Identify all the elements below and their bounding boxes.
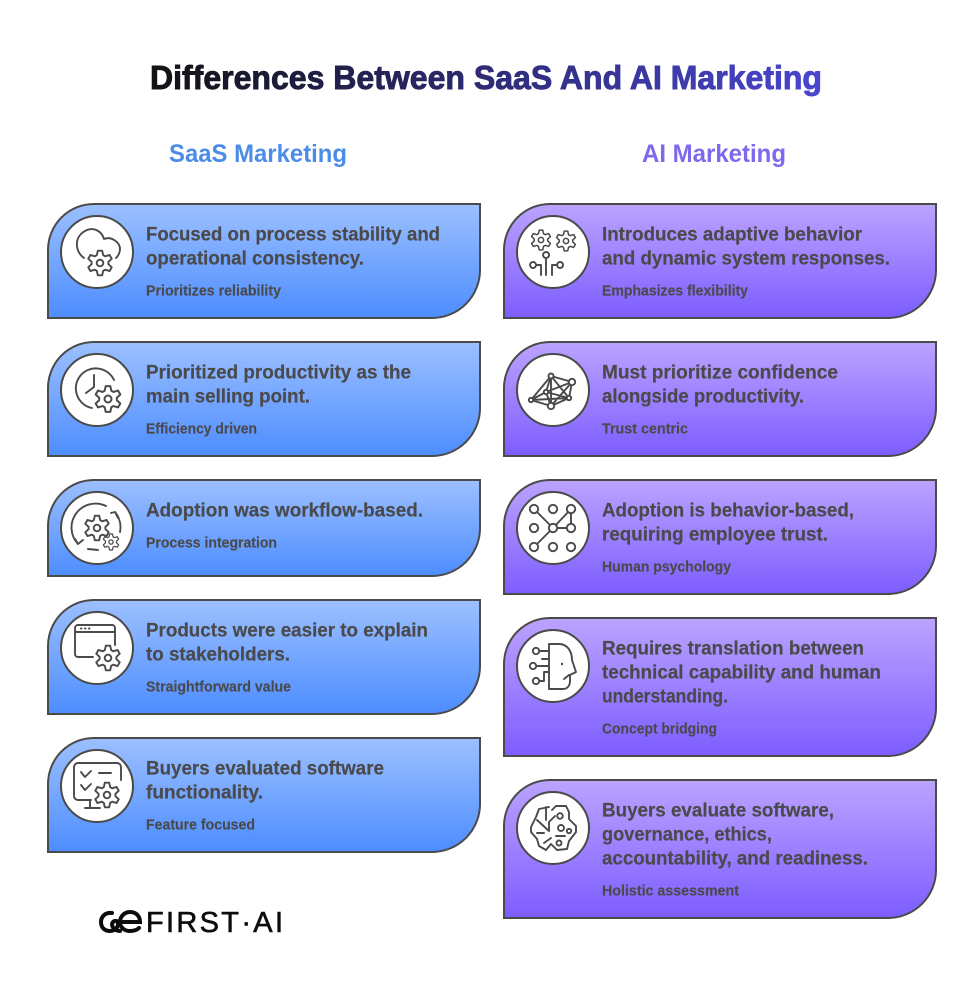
card text: Must prioritize confidence xyxy=(602,362,838,384)
card text: Adoption was workflow-based. xyxy=(146,500,423,522)
icon: AI head profile xyxy=(517,630,589,702)
panel: AI card 3 xyxy=(504,480,936,594)
card text: to stakeholders. xyxy=(146,644,290,666)
card text xyxy=(146,758,384,834)
heading: SaaS Marketing: SaaS Marketing xyxy=(169,140,347,168)
icon: monitor checklist with gear xyxy=(61,750,133,822)
card text: accountability, and readiness. xyxy=(602,848,868,870)
card text: Requires translation between xyxy=(602,638,864,660)
title: Differences Between SaaS And AI Marketing xyxy=(150,59,822,96)
icon: network mesh xyxy=(517,354,589,426)
card text xyxy=(602,362,838,438)
card text xyxy=(146,620,428,696)
card text xyxy=(602,638,881,738)
card text xyxy=(602,224,890,300)
icon: browser window with gear xyxy=(61,612,133,684)
card text: main selling point. xyxy=(146,386,310,408)
card text xyxy=(146,224,440,300)
panel: AI card 1 xyxy=(504,204,936,318)
card text: requiring employee trust. xyxy=(602,524,828,546)
panel: AI card 2 xyxy=(504,342,936,456)
card text: Process integration xyxy=(146,536,277,552)
panel: SaaS card 2 xyxy=(48,342,480,456)
card text: Emphasizes flexibility xyxy=(602,284,748,300)
heading: AI Marketing: AI Marketing xyxy=(642,140,786,168)
icon: gears and circuit xyxy=(517,216,589,288)
card text: Holistic assessment xyxy=(602,884,739,900)
card text: Efficiency driven xyxy=(146,422,257,438)
card text: Buyers evaluated software xyxy=(146,758,384,780)
card text: Straightforward value xyxy=(146,680,291,696)
card text: alongside productivity. xyxy=(602,386,804,408)
icon: cycle with gears xyxy=(61,492,133,564)
card text: Introduces adaptive behavior xyxy=(602,224,862,246)
card text: governance, ethics, xyxy=(602,824,772,846)
card text xyxy=(602,500,854,576)
card text: Prioritized productivity as the xyxy=(146,362,411,384)
icon: circuit brain xyxy=(517,792,589,864)
icon: node graph xyxy=(517,492,589,564)
panel: SaaS card 1 xyxy=(48,204,480,318)
panel: AI card 4 xyxy=(504,618,936,756)
card text: understanding. xyxy=(602,686,728,708)
card text: Buyers evaluate software, xyxy=(602,800,834,822)
card text: operational consistency. xyxy=(146,248,364,270)
card text: Concept bridging xyxy=(602,722,717,738)
card text xyxy=(146,362,411,438)
card text: Human psychology xyxy=(602,560,731,576)
logo: weFIRST·AI: FIRST·AI xyxy=(146,907,283,939)
card text: Feature focused xyxy=(146,818,255,834)
card text: Focused on process stability and xyxy=(146,224,440,246)
panel: SaaS card 4 xyxy=(48,600,480,714)
panel: SaaS card 5 xyxy=(48,738,480,852)
panel: AI card 5 xyxy=(504,780,936,918)
card text: Trust centric xyxy=(602,422,688,438)
card text: and dynamic system responses. xyxy=(602,248,890,270)
card text xyxy=(146,500,423,552)
card text: Adoption is behavior-based, xyxy=(602,500,854,522)
panel: SaaS card 3 xyxy=(48,480,480,576)
icon: clock with gear xyxy=(61,354,133,426)
card text: Prioritizes reliability xyxy=(146,284,281,300)
card text: technical capability and human xyxy=(602,662,881,684)
card text: functionality. xyxy=(146,782,263,804)
icon: cloud with gear xyxy=(61,216,133,288)
card text xyxy=(602,800,868,900)
card text: Products were easier to explain xyxy=(146,620,428,642)
